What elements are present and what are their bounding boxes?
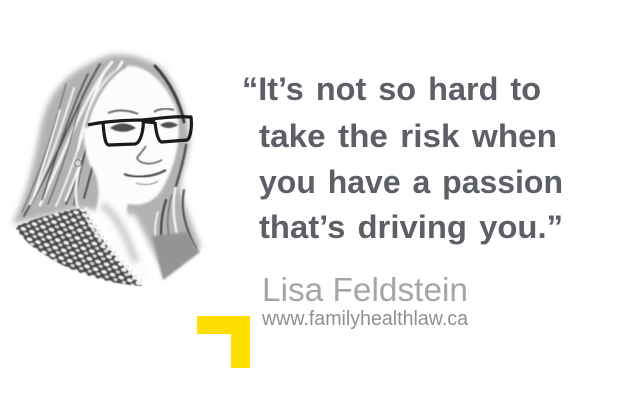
portrait sketch — [12, 54, 201, 286]
quote text — [242, 71, 563, 245]
glasses — [88, 117, 191, 145]
hair — [12, 54, 201, 275]
mouth — [124, 170, 166, 177]
hair line shadow — [86, 66, 126, 128]
nose — [137, 146, 162, 164]
yellow corner mark — [197, 316, 250, 368]
website: www.familyhealthlaw.ca — [261, 308, 469, 330]
face and neck — [84, 66, 179, 283]
earring — [75, 160, 81, 166]
jacket right side — [152, 232, 200, 280]
name: Lisa Feldstein — [262, 271, 468, 308]
quote text: you have a passion — [259, 164, 563, 200]
quote text: “It’s not so hard to — [242, 71, 541, 107]
eyes — [110, 122, 178, 132]
neck shading — [102, 205, 136, 262]
quote text: that’s driving you.” — [259, 209, 563, 245]
jacket — [15, 208, 142, 286]
eyebrows — [108, 109, 174, 114]
quote text: take the risk when — [259, 118, 557, 154]
collar trim — [84, 208, 142, 284]
